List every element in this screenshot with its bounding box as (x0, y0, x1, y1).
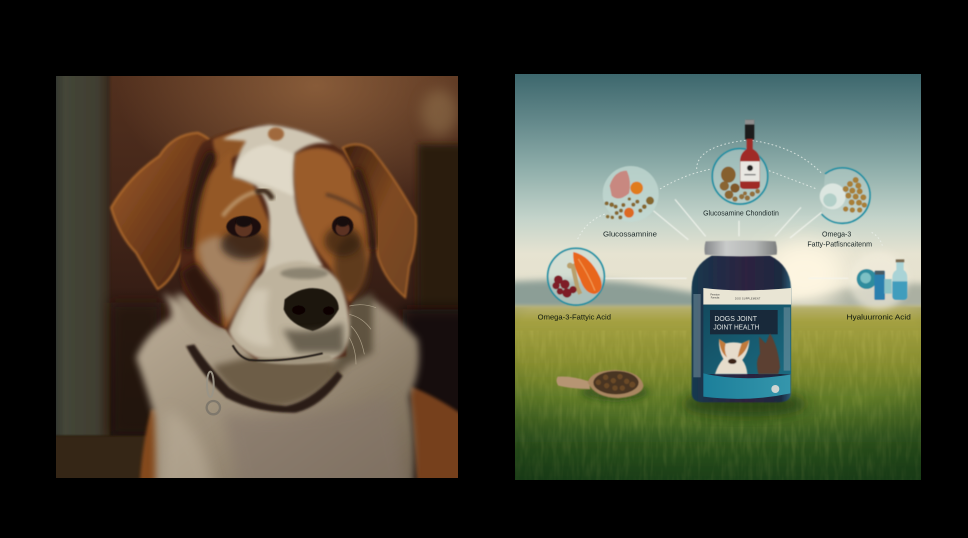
neck shadow (181, 263, 223, 328)
seal (771, 385, 779, 393)
eyes (221, 190, 364, 260)
grass field (515, 304, 921, 480)
ingredient: hyaluronic acid vials (849, 251, 908, 310)
nose (284, 288, 339, 331)
right face brown (293, 148, 371, 303)
cream label header (703, 288, 791, 305)
dotted arcs (578, 140, 882, 246)
jar body (692, 256, 791, 402)
side text strip (693, 294, 790, 377)
dog body and chest fur (136, 293, 469, 496)
ear seam shadow (188, 153, 213, 249)
jar cap (704, 240, 777, 256)
cream label header: DOG SUPPLEMENT (735, 298, 761, 300)
collar with metal ring (186, 344, 343, 414)
bottom band (703, 373, 790, 399)
muzzle (229, 261, 350, 363)
muzzle highlight (236, 289, 273, 347)
label: omega-3 fatty: Omega-3 (822, 231, 851, 238)
label: glucosamine chondroitin: Glucosamine Chondiotin (703, 210, 779, 217)
cream label header: Formula (711, 297, 720, 300)
panel: joint health infographic (502, 74, 934, 492)
ingredient: salmon, bone and berries (548, 248, 604, 305)
bright blaze (234, 144, 293, 196)
head (180, 124, 373, 363)
right ear (343, 144, 416, 298)
ingredient: omega-3 capsule and kibble (820, 168, 870, 223)
scoop with kibble (556, 370, 648, 401)
title plate (710, 310, 778, 334)
connector lines (603, 199, 848, 278)
head base (180, 124, 371, 362)
whiskers (349, 305, 376, 364)
label: omega-3 fatty: Fatty-Patfisncaitenm (807, 241, 872, 248)
room background (56, 76, 458, 478)
label: glucosamine: Glucossamnine (603, 229, 657, 238)
sky and horizon (502, 74, 934, 314)
supplement jar (682, 240, 808, 417)
label: omega-3 fatty (807, 231, 872, 248)
title plate: DOGS JOINT (714, 314, 757, 323)
ingredient: glucosamine (603, 166, 659, 222)
ingredient: red bottle with chondroitin (712, 120, 768, 204)
panel: sad dog portrait (56, 76, 458, 478)
tan cheek (198, 237, 264, 323)
icon: small dog (715, 339, 749, 374)
left ear (111, 133, 216, 289)
cream label header: Premium (710, 293, 720, 296)
left face brown (193, 151, 269, 329)
teal label panel (703, 305, 791, 374)
icon: shepherd dog (757, 333, 780, 374)
label: omega-3 fatty acid: Omega-3-Fattyic Acid (538, 314, 611, 321)
crown brown (213, 129, 253, 166)
title plate: JOINT HEALTH (713, 322, 759, 331)
head top and blaze (223, 125, 333, 286)
mouth (233, 323, 344, 364)
label: hyaluronic acid: Hyaluurronic Acid (846, 314, 911, 321)
